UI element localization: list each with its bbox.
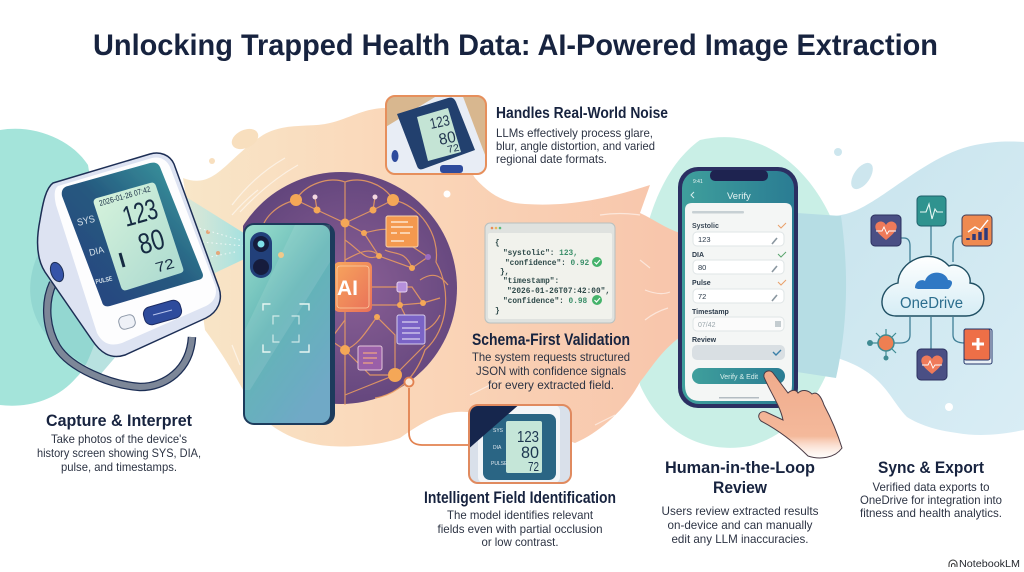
form fields: Pulse <box>692 280 711 287</box>
text: schema-first validation <box>472 330 630 392</box>
panel: JSON code: "confidence": 0.98 <box>503 298 588 306</box>
cloud <box>882 256 984 316</box>
text: schema-first validation: The system requests structured <box>472 350 630 364</box>
readings: 2026-01-26 07:42 <box>98 185 152 208</box>
panel: JSON code <box>485 223 615 323</box>
text: capture and interpret <box>37 411 201 474</box>
panel: JSON code: "2026-01-26T07:42:00", <box>507 288 610 296</box>
panel: JSON code: }, <box>500 269 509 277</box>
text: capture and interpret: pulse, and timestamps. <box>61 460 177 474</box>
cuff tube <box>47 283 192 387</box>
text: handles real-world noise: LLMs effectively process glare, <box>496 126 653 140</box>
icon: heart monitor <box>871 215 901 246</box>
AI chip: AI <box>337 277 358 300</box>
floating card: magenta <box>358 346 382 370</box>
text: handles real-world noise: regional date formats. <box>496 152 607 166</box>
text: capture and interpret: Capture & Interpret <box>46 411 192 430</box>
form fields: 123 <box>698 235 711 244</box>
background blobs <box>0 108 1024 448</box>
text: intelligent field identification: Intelligent Field Identification <box>424 488 616 507</box>
text: schema-first validation: JSON with confidence signals <box>476 364 626 378</box>
icon: pulse <box>917 196 946 226</box>
floating card: purple small <box>397 282 407 292</box>
form fields: 07/42 <box>698 322 716 329</box>
text: sync and export <box>860 458 1002 520</box>
thumbnail: noisy photo: 123 <box>428 112 451 133</box>
text: sync and export: fitness and health analytics. <box>860 506 1002 520</box>
cloud: OneDrive <box>900 295 963 312</box>
floating card: purple <box>397 315 425 344</box>
AI chip <box>334 262 372 312</box>
readings: 123 <box>119 193 162 234</box>
panel: JSON code: } <box>495 308 500 316</box>
connector to occluded display <box>404 378 470 445</box>
icon: chart <box>962 215 992 246</box>
thumbnail: noisy photo: 80 <box>437 129 458 149</box>
thumbnail: occluded display: 72 <box>528 459 539 474</box>
icon: heart <box>917 349 947 380</box>
text: schema-first validation: for every extracted field. <box>488 378 614 392</box>
icon: blood pressure monitor <box>37 153 220 387</box>
form fields: 80 <box>698 263 706 272</box>
text: human-in-the-loop review: Human-in-the-Loop <box>665 458 815 477</box>
verify button <box>692 368 785 384</box>
panel: JSON code: { <box>495 240 500 248</box>
thumbnail: occluded display: SYS <box>493 428 504 434</box>
icon: blood pressure monitor: PULSE <box>95 275 114 286</box>
text: intelligent field identification: fields even with partial occlusion <box>438 522 602 536</box>
text: handles real-world noise <box>496 105 668 166</box>
text: human-in-the-loop review: on-device and can manually <box>668 518 812 532</box>
readings: 80 <box>135 223 168 261</box>
text: human-in-the-loop review <box>662 458 818 546</box>
text: sync and export: Sync & Export <box>878 458 984 477</box>
icon: verify phone <box>678 167 798 408</box>
icon: blood pressure monitor: SYS <box>76 214 96 229</box>
panel: JSON code: "systolic": 123, <box>503 250 578 258</box>
text: sync and export: Verified data exports to <box>872 480 990 494</box>
title: Unlocking Trapped Health Data: AI-Powered Image Extraction <box>93 29 938 62</box>
icon: verify phone: Verify <box>727 191 751 202</box>
form fields: Timestamp <box>692 309 729 316</box>
verify button: Verify & Edit <box>720 374 758 381</box>
panel: JSON code: "timestamp": <box>503 278 559 286</box>
icon: smartphone <box>243 223 335 425</box>
LCD <box>94 183 183 290</box>
thumbnail: occluded display: DIA <box>493 445 502 451</box>
text: capture and interpret: history screen showing SYS, DIA, <box>37 446 201 460</box>
form fields <box>692 223 785 360</box>
icon: virus node <box>867 329 896 360</box>
brain circle <box>225 172 457 405</box>
text: human-in-the-loop review: edit any LLM inaccuracies. <box>672 532 808 546</box>
form fields: Review <box>692 337 717 344</box>
display panel <box>62 163 203 306</box>
form fields: Systolic <box>692 223 719 230</box>
icon: check 1 <box>592 257 602 267</box>
panel: JSON code: "confidence": 0.92 <box>505 260 590 268</box>
text: intelligent field identification <box>424 488 616 549</box>
icon: medical book <box>964 329 992 364</box>
power button and start button <box>118 299 183 330</box>
NotebookLM watermark: NotebookLM <box>959 559 1020 570</box>
thumbnail: noisy photo <box>384 94 490 178</box>
text: sync and export: OneDrive for integration into <box>860 493 1002 507</box>
form fields: 72 <box>698 292 706 301</box>
text: handles real-world noise: Handles Real-World Noise <box>496 105 668 122</box>
text: intelligent field identification: or low contrast. <box>482 535 558 549</box>
thumbnail: occluded display <box>466 402 572 484</box>
text: intelligent field identification: The model identifies relevant <box>447 508 594 522</box>
readings <box>98 185 176 275</box>
icon: hand tapping <box>759 371 842 458</box>
text: human-in-the-loop review: Review <box>713 478 768 497</box>
thumbnail: occluded display: PULSE <box>491 461 508 467</box>
text: schema-first validation: Schema-First Validation <box>472 330 630 349</box>
cuff connector <box>48 261 66 283</box>
scan brackets <box>263 304 309 352</box>
form fields: DIA <box>692 252 704 259</box>
camera module <box>250 232 284 278</box>
monitor body <box>37 153 220 357</box>
floating card: orange <box>386 216 418 247</box>
thumbnail: occluded display: 123 <box>517 429 539 446</box>
text: capture and interpret: Take photos of the device's <box>51 432 187 446</box>
icon: blood pressure monitor: DIA <box>88 244 106 259</box>
icon: verify phone: 9:41 <box>693 179 703 185</box>
thumbnail: occluded display: 80 <box>521 443 539 462</box>
thumbnail: noisy photo: 72 <box>446 143 461 156</box>
text: handles real-world noise: blur, angle distortion, and varied <box>496 139 655 153</box>
icon: scan beam <box>175 190 255 280</box>
readings: 72 <box>153 255 176 275</box>
icon: OneDrive cloud hub <box>867 196 992 380</box>
icon: check 2 <box>592 295 602 305</box>
text: human-in-the-loop review: Users review extracted results <box>662 504 818 518</box>
